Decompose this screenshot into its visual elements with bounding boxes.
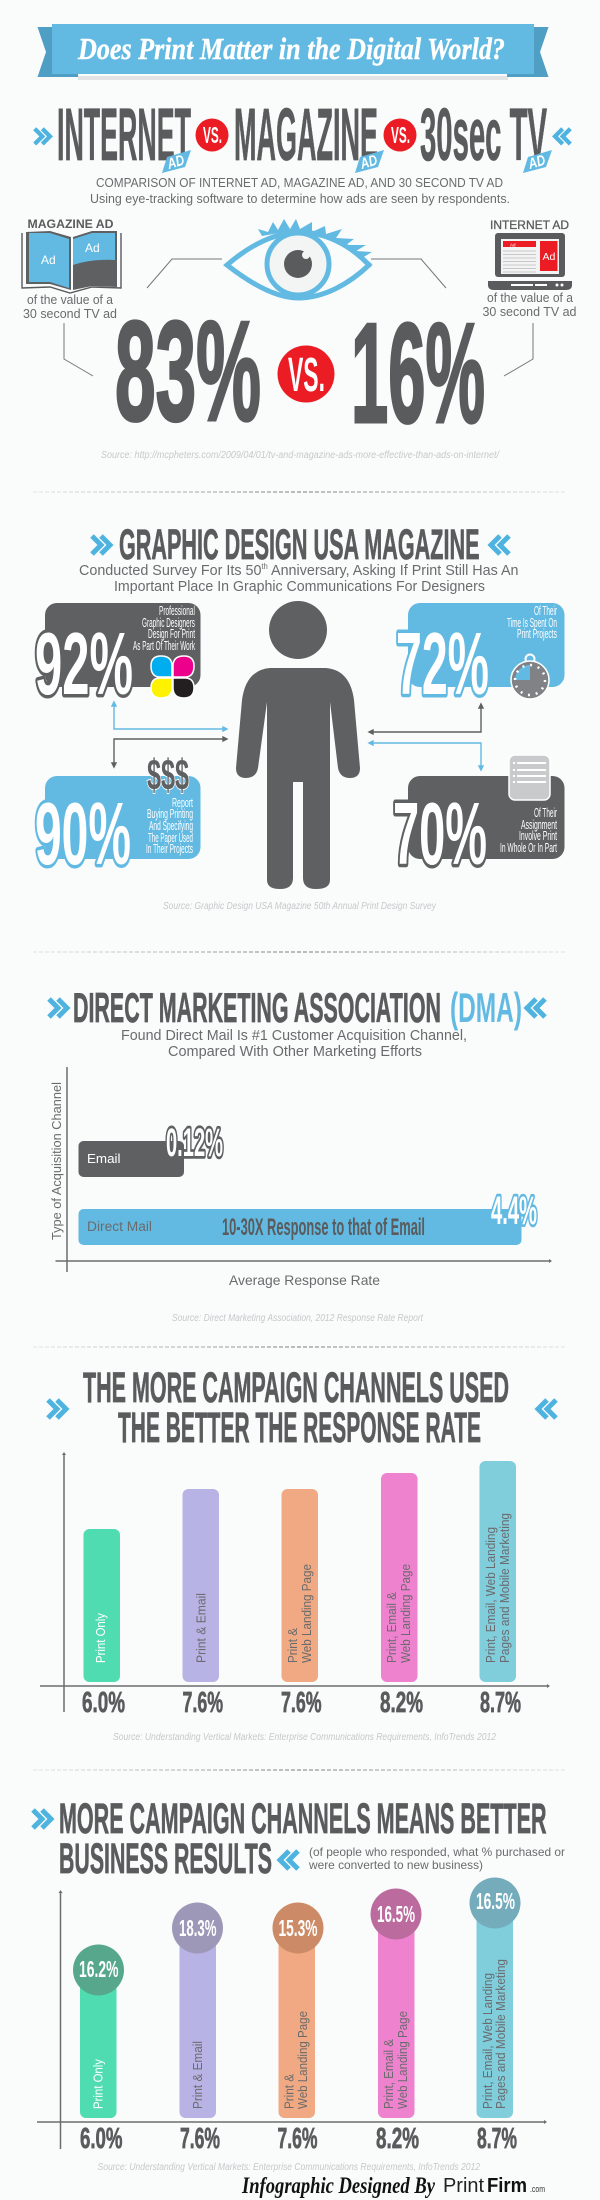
- heading: dma: (DMA): [450, 984, 522, 1031]
- bar chart: response rate: [49, 1067, 552, 1288]
- bar: print and email: Print & Email: [191, 2041, 205, 2109]
- bar: print email web landing page: Web Landing Page: [399, 1564, 413, 1663]
- bar: print and email: 7.6%: [182, 1687, 223, 1719]
- heading: internet vs magazine vs tv: [35, 93, 570, 176]
- bar: print and email: 7.6%: [180, 2123, 220, 2155]
- icon: person: [236, 601, 360, 889]
- bar: print email web landing page: [380, 1473, 423, 1719]
- bar: print and web landing page: Web Landing Page: [300, 1564, 314, 1663]
- bar: direct mail: 4.4%: [491, 1189, 537, 1233]
- bar: print and web landing page: Print &: [282, 2073, 296, 2109]
- icon: eye: [227, 219, 374, 298]
- credit: designed by printfirm: Infographic Designed By: [241, 2173, 436, 2198]
- subheading: survey: Conducted Survey For Its 50: [79, 562, 270, 579]
- icon: magazine ad: MAGAZINE AD: [28, 217, 114, 231]
- bar: print only: [73, 1944, 124, 2155]
- credit: designed by printfirm: .com: [530, 2184, 545, 2194]
- magazine ad caption: [23, 292, 117, 321]
- panel: 70%: Assignment: [521, 817, 557, 832]
- bar chart: response rate: Type of Acquisition Channel: [49, 1082, 64, 1240]
- note: of people who responded: were converted to new business): [308, 1858, 483, 1872]
- bar: print only: Print Only: [92, 2058, 106, 2109]
- bar: print and web landing page: Print &: [286, 1627, 300, 1663]
- heading: business results: BUSINESS RESULTS: [59, 1835, 272, 1883]
- subheading: comparison: COMPARISON OF INTERNET AD, MAGAZINE AD, AND 30 SECOND TV AD: [96, 175, 503, 190]
- source 4: Source: Understanding Vertical Markets: Enterprise Communications Requirements, InfoTrends 2012: [113, 1732, 496, 1743]
- internet ad caption: [482, 290, 576, 319]
- panel: 72%: Of Their: [534, 603, 557, 618]
- bar: direct mail: [78, 1189, 537, 1245]
- heading: internet vs magazine vs tv: VS.: [203, 122, 222, 148]
- bar: direct mail: Direct Mail: [87, 1219, 152, 1234]
- icon: laptop internet ad: Ad: [542, 251, 556, 263]
- bar: print and web landing page: 15.3%: [278, 1915, 318, 1941]
- note: of people who responded: (of people who responded, what % purchased or: [309, 1845, 565, 1859]
- icon: laptop internet ad: INTERNET AD: [490, 218, 569, 232]
- bar: print only: 6.0%: [82, 1687, 125, 1719]
- source 3: Source: Direct Marketing Association, 2012 Response Rate Report: [172, 1313, 424, 1324]
- icon: laptop internet ad: Ad: [510, 242, 516, 248]
- subheading: comparison: [90, 175, 510, 206]
- bar: print and email: 18.3%: [179, 1915, 216, 1941]
- panel: 90%: Buying Printing: [147, 806, 193, 821]
- bar: all channels: [480, 1461, 521, 1719]
- bar: print and web landing page: [281, 1489, 322, 1719]
- heading: internet vs magazine vs tv: AD: [165, 152, 187, 173]
- bar: email: Email: [87, 1151, 121, 1166]
- bar: email: [78, 1121, 223, 1177]
- panel: 90%: And Specifying: [149, 818, 193, 833]
- heading: internet vs magazine vs tv: INTERNET: [57, 93, 191, 176]
- bar: all channels: Pages and Mobile Marketing: [494, 1959, 508, 2109]
- bar: print and email: [172, 1902, 223, 2155]
- bar: all channels: Print, Email, Web Landing: [484, 1527, 498, 1663]
- icon: magazine ad: [22, 217, 121, 293]
- panel: 70%: Involve Print: [519, 828, 557, 843]
- bar: print email web landing page: Print, Email &: [382, 2038, 396, 2109]
- heading: internet vs magazine vs tv: AD: [358, 152, 380, 173]
- banner title: [38, 24, 548, 80]
- magazine ad caption: 30 second TV ad: [23, 306, 117, 321]
- subheading: survey: Important Place In Graphic Communications For Designers: [114, 578, 485, 595]
- panel: 90%: In Their Projects: [146, 841, 193, 856]
- subheading: dma: Compared With Other Marketing Efforts: [168, 1043, 422, 1060]
- panel: 72%: 72%: [396, 614, 489, 713]
- icon: laptop internet ad: [488, 218, 572, 290]
- bar chart: response rate: Average Response Rate: [229, 1272, 380, 1288]
- panel: 72%: Print Projects: [517, 626, 557, 641]
- panel: 92%: Professional: [159, 603, 195, 618]
- icon: dollar signs: $$$: [147, 751, 189, 800]
- bar: print and web landing page: Web Landing Page: [296, 2011, 310, 2109]
- bar: direct mail: 10-30X Response to that of Email: [222, 1214, 425, 1241]
- bar: print only: 16.2%: [79, 1956, 118, 1982]
- heading: response rate: [48, 1364, 556, 1452]
- bar: all channels: 8.7%: [477, 2123, 517, 2155]
- panel: 70%: 70%: [393, 784, 487, 883]
- source 2: Source: Graphic Design USA Magazine 50th Annual Print Design Survey: [163, 901, 437, 912]
- internet ad caption: of the value of a: [487, 290, 574, 305]
- credit: designed by printfirm: Print: [443, 2175, 484, 2197]
- internet ad caption: 30 second TV ad: [482, 304, 576, 319]
- icon: magazine ad: Ad: [41, 253, 56, 267]
- bar: all channels: [470, 1878, 520, 2155]
- panel: 92%: 92%: [35, 614, 133, 713]
- bar: print email web landing page: Web Landing Page: [396, 2011, 410, 2109]
- subheading: survey: [79, 562, 518, 595]
- bar: print only: 6.0%: [80, 2123, 123, 2155]
- magazine ad caption: of the value of a: [27, 292, 114, 307]
- credit: designed by printfirm: Firm: [487, 2175, 527, 2197]
- subheading: dma: Found Direct Mail Is #1 Customer Acquisition Channel,: [121, 1027, 467, 1044]
- bar: email: 0.12%: [166, 1121, 223, 1165]
- bar: print and web landing page: 7.6%: [278, 2123, 318, 2155]
- panel: 90%: The Paper Used: [148, 830, 193, 845]
- note: of people who responded: [308, 1845, 565, 1872]
- icon: document: [509, 755, 550, 800]
- bar: print and web landing page: 7.6%: [281, 1687, 322, 1719]
- bar: print only: [82, 1529, 125, 1719]
- panel: 92%: Design For Print: [148, 626, 195, 641]
- bar chart: business results: [37, 1878, 547, 2155]
- icon: magazine ad: Ad: [85, 241, 100, 255]
- bar: print email web landing page: [370, 1888, 422, 2155]
- bar: all channels: Print, Email, Web Landing: [481, 1973, 495, 2109]
- connector lines: [64, 259, 533, 376]
- source 1: Source: http://mcpheters.com/2009/04/01/tv-and-magazine-ads-more-effective-than-ads-on-internet/: [101, 450, 500, 461]
- bar: print and web landing page: [272, 1902, 324, 2155]
- heading: business results: [33, 1795, 546, 1883]
- bar: print and email: [182, 1489, 223, 1719]
- panel: 90%: 90%: [35, 784, 131, 883]
- bar: all channels: 16.5%: [476, 1888, 515, 1914]
- bar: print only: Print Only: [94, 1612, 108, 1663]
- panel: 92%: Graphic Designers: [142, 615, 195, 630]
- panel: 92%: As Part Of Their Work: [133, 638, 195, 653]
- source 5: Source: Understanding Vertical Markets: Enterprise Communications Requirements, InfoTrends 2012: [98, 2162, 480, 2173]
- bar: print email web landing page: 16.5%: [377, 1901, 415, 1927]
- bar chart: response rate by channels: [40, 1452, 550, 1719]
- bar: print email web landing page: Print, Email &: [385, 1591, 399, 1663]
- bar: print email web landing page: 8.2%: [380, 1687, 423, 1719]
- icon: stopwatch: [511, 654, 549, 699]
- stat: 83% vs 16%: 83%: [115, 292, 261, 451]
- panel: 90%: Report: [172, 795, 193, 810]
- subheading: comparison: Using eye-tracking software to determine how ads are seen by respondents.: [90, 191, 510, 206]
- arrows around person: [112, 702, 483, 770]
- heading: internet vs magazine vs tv: VS.: [391, 122, 410, 148]
- bar: print and email: Print & Email: [194, 1593, 208, 1663]
- banner title: Does Print Matter in the Digital World?: [77, 31, 505, 66]
- stat: 83% vs 16%: VS.: [288, 349, 325, 402]
- bar: print email web landing page: 8.2%: [376, 2123, 419, 2155]
- subheading: dma: [121, 1027, 467, 1060]
- bar: all channels: Pages and Mobile Marketing: [498, 1513, 512, 1663]
- bar: all channels: 8.7%: [480, 1687, 521, 1719]
- subheading: survey: th: [261, 562, 268, 571]
- heading: internet vs magazine vs tv: AD: [526, 152, 548, 173]
- subheading: survey: Anniversary, Asking If Print Still Has An: [268, 562, 518, 579]
- panel: 70%: Of Their: [534, 805, 557, 820]
- icon: cmyk clover: [151, 656, 194, 698]
